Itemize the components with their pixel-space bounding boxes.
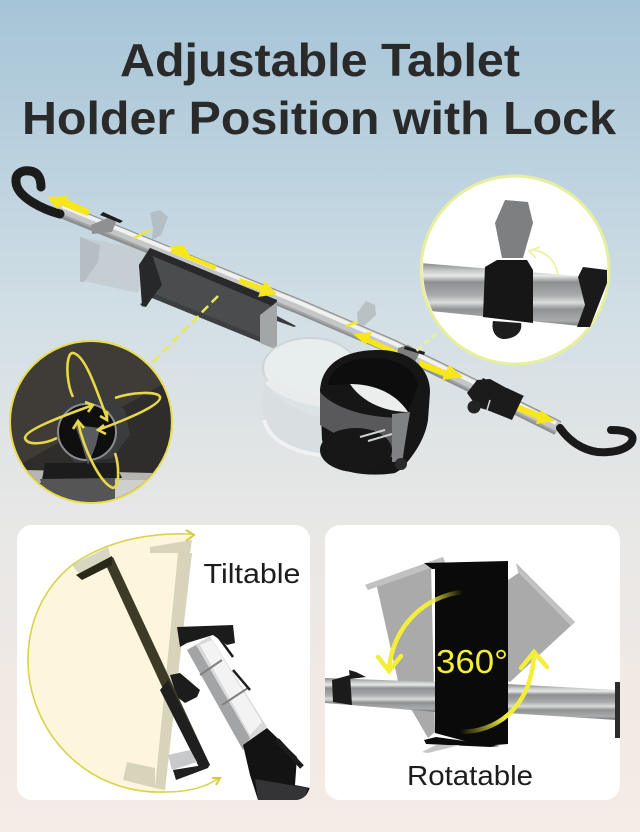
silver rod, tilt view [187,636,267,750]
telescopic lock, right end [467,378,524,420]
clamp on rod, centre right [397,345,425,364]
black cup holder [320,350,430,475]
grey flip paddle [495,200,533,258]
label: Rotatable: Rotatable [407,760,533,791]
label: 360 degrees: 360° [436,643,508,680]
ghost paddle and arrow, centre [346,301,376,326]
ball joint [170,673,200,703]
black tablet, tilted [104,557,210,769]
title [22,34,616,144]
rod clamps [177,625,235,647]
yellow double arrows on rod [47,196,555,424]
ghost cup holder [262,338,357,455]
left rail clamp [332,675,352,705]
zoom circle: lock detail [420,176,609,364]
label: Tiltable: Tiltable [204,558,300,589]
title: Holder Position with Lock [22,92,616,144]
left rail [325,678,436,712]
right end cap [577,267,607,327]
dashed callout line to joint circle [150,296,218,365]
hook, right end [560,428,633,452]
title: Adjustable Tablet [120,34,520,86]
small flip arrow [533,250,558,275]
ghost tablet holder, previous position [80,210,168,293]
ball joint body [22,384,170,502]
ghost tablet, upright [72,540,192,790]
ghost tablets, rotated [365,557,445,738]
telescopic rod [60,206,558,432]
small yellow flip arrow, left [134,230,150,238]
card: rotatable [325,525,620,800]
swept tilt area [28,534,192,792]
rotation arrows [25,353,160,488]
knob under clamp [492,321,521,339]
black tablet, front [435,562,508,746]
clamp on rod, left [91,212,123,234]
right rail [506,684,617,720]
rotate arrows [378,592,547,732]
tablet holder, black [139,248,296,350]
rail profile inside circle [420,263,590,327]
hook, left end [16,171,60,214]
card: tiltable [17,525,310,800]
tilt arc arrow [28,534,219,792]
zoom circle: ball joint rotation [10,341,172,512]
callout line to lock circle [415,333,437,352]
lock clamp body [483,260,533,323]
